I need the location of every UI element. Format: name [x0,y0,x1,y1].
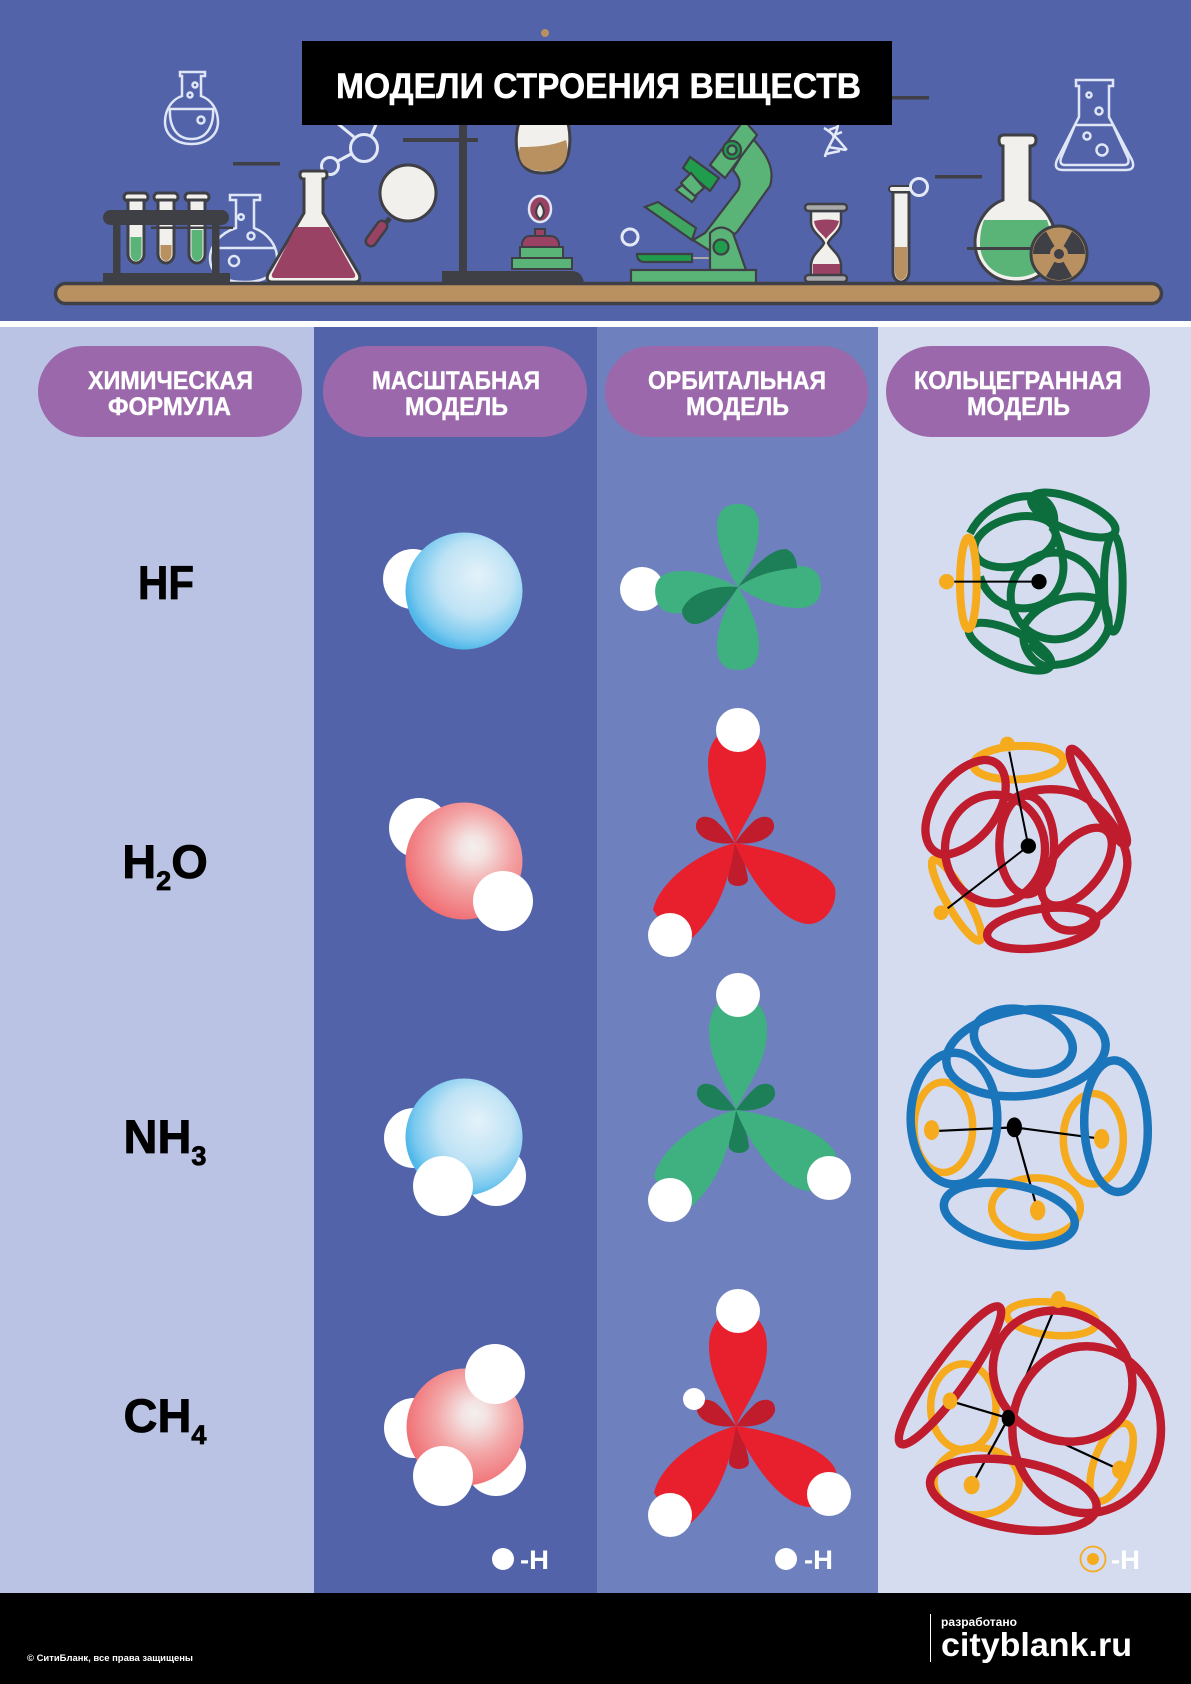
column heading: scale model: МАСШТАБНАЯ [372,367,540,395]
scale model: NH3 [384,1078,526,1216]
column heading: chemical formula: ХИМИЧЕСКАЯ [88,367,253,395]
formula: H2O: O [171,835,208,888]
icon: molecule chain [322,122,378,174]
icon: magnifying glass [371,165,436,241]
dash marks [233,96,982,178]
orbital model: CH4 [648,1289,851,1537]
header background [0,0,1191,321]
icon: outline flask behind rack [210,195,277,282]
legend: hydrogen, orbital model: -H [804,1545,833,1575]
column backgrounds [0,327,1191,1593]
developer logo: cityblank.ru [941,1626,1132,1663]
column heading: orbital model: ОРБИТАЛЬНАЯ [648,367,826,395]
developer caption: разработано [941,1615,1017,1629]
icon: flask under title [516,120,570,173]
icon: test tubes [124,193,209,263]
icon: bubble ring [622,229,638,245]
copyright: © СитиБланк, все права защищены [27,1653,193,1664]
icon: DNA helix [824,125,847,157]
column heading: scale model: МОДЕЛЬ [405,393,508,421]
formula: HF: HF [138,556,194,609]
orbital model: HF [620,504,821,670]
scale model: H2O [389,798,533,931]
logo divider [930,1614,931,1662]
orbital model: NH3 [648,973,851,1222]
formula: NH3: 3 [191,1141,206,1171]
title [302,41,892,125]
legend: hydrogen, scale model [492,1545,549,1575]
column heading: ring-face model: КОЛЬЦЕГРАННАЯ [914,367,1122,395]
icon: radiation sign [1030,226,1088,282]
formula: NH3: NH [124,1110,191,1163]
formula: CH4: 4 [191,1420,206,1450]
column heading: scale model [323,346,587,437]
legend: hydrogen, ring model [1080,1545,1140,1575]
scale model: CH4 [384,1344,526,1506]
scale model: HF [383,532,522,650]
orbital model: H2O [648,708,835,957]
icon: burner [512,196,572,269]
formula: H2O: 2 [156,866,171,896]
icon: hourglass [805,204,847,282]
column heading: chemical formula [38,346,302,437]
icon: test tube rack [103,210,233,283]
ring model: H2O [925,737,1134,955]
icon: outline conical flask [1056,80,1133,170]
icon: outline round flask [165,72,218,144]
column heading: orbital model [605,346,868,437]
icon: conical flask with red liquid [267,171,360,282]
laboratory illustration [56,29,1162,304]
icon: shelf [56,284,1162,304]
legend: hydrogen, orbital model [775,1545,833,1575]
legend: hydrogen, scale model: -H [520,1545,549,1575]
ring model: HF [939,483,1123,680]
icon: thin test tube [889,178,928,282]
icon: lab stand [403,120,584,283]
icon: big round flask with green liquid [967,135,1056,282]
ring model: NH3 [911,1000,1151,1254]
ring model: CH4 [888,1291,1161,1542]
legend: hydrogen, ring model: -H [1111,1545,1140,1575]
column heading: ring-face model [886,346,1150,437]
formula: H2O: H [122,835,156,888]
title: МОДЕЛИ СТРОЕНИЯ ВЕЩЕСТВ [336,67,861,106]
column heading: orbital model: МОДЕЛЬ [686,393,789,421]
formula: CH4: CH [124,1389,191,1442]
column heading: ring-face model: МОДЕЛЬ [967,393,1070,421]
column heading: chemical formula: ФОРМУЛА [108,393,231,421]
decorative dot [541,29,549,37]
icon: microscope [631,120,772,283]
footer [0,1593,1191,1684]
